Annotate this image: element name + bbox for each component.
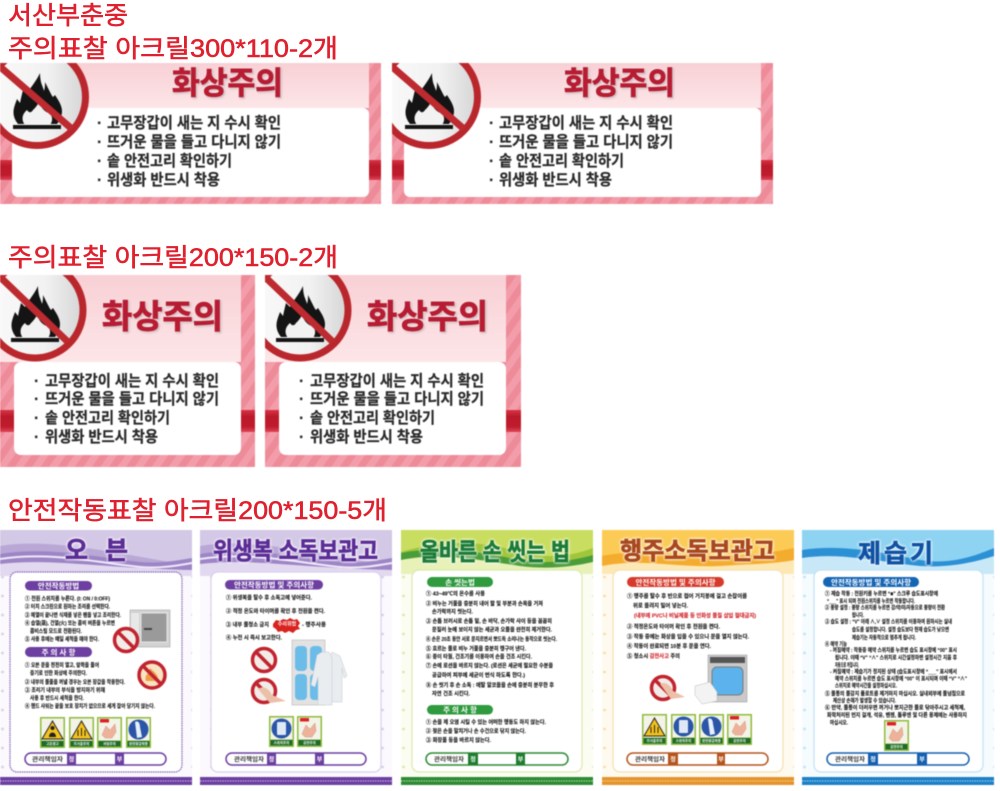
manager signature bar: 부 (718, 756, 724, 764)
instructions: ③ 습도 설정 : “V” 아래 ∧,∨ 설정 스위치를 이용하여 원하시는 실내 (825, 618, 952, 626)
instructions: 제산상 손해가 발생할 수 있습니다. (833, 697, 896, 705)
instructions: ② 적정온도와 타이머 확인 후 전원을 켠다. (627, 622, 720, 630)
instructions: 됩니다. 이때 “V” “∧” 스위치로 시간설정하면 설정시간 지움 후 (835, 654, 957, 662)
instructions: 화학처리된 먼지 걸개, 석유, 벤젠, 톨루엔 및 다른 용제에는 사용하지 (827, 711, 967, 719)
icons: safety marks: 고온경고 (46, 741, 59, 746)
pill heading (25, 647, 92, 657)
pill heading: 주 의 사 항 (42, 647, 76, 657)
list: 위생화 반드시 착용 (45, 428, 158, 446)
pill heading: 안전작동방법 및 주의사항 (831, 577, 911, 587)
icon: no fire (264, 274, 352, 362)
list: 뜨거운 물을 들고 다니지 않기 (310, 390, 484, 408)
instructions: ④ 작동이 완료되면 10분 후 문을 연다. (627, 642, 711, 650)
pill heading (427, 577, 493, 587)
pill heading: 주 의 사 항 (443, 705, 477, 715)
instructions: ③ 내부 물청소 금지 (226, 620, 269, 628)
instructions: ④ 누전 시 즉시 보고한다. (226, 633, 282, 641)
instructions: ⑤ 청소시 감전사고 주의 (627, 652, 680, 660)
list (489, 114, 673, 189)
icons: safety marks: 스위치주의 (676, 738, 691, 743)
instructions: - 꺼짐예약 : 작동중 예약 스위치를 누르면 습도 표시창에 “00” 표시 (830, 646, 957, 654)
list: · (489, 153, 494, 170)
manager signature bar: 부 (919, 756, 925, 764)
list: 뜨거운 물을 들고 다니지 않기 (499, 133, 673, 151)
manager signature bar: 관리책임자 (635, 756, 666, 764)
instructions (627, 592, 756, 660)
cautions: ② 젖은 손을 말치거나 손 수건으로 닦지 않는다. (426, 727, 526, 735)
instructions: ⑤ 물통의 물감지 플로트를 제거하지 마십시오. 실내외부에 물넘침으로 (825, 689, 965, 697)
heading: 아크릴 200x150: 주의표찰 아크릴200*150-2개 (8, 244, 338, 272)
list: · (489, 115, 494, 132)
instructions: 자동으로 꺼집니다. (835, 661, 859, 669)
instructions: 제습기는 자동적으로 멈추게 됩니다. (852, 633, 916, 641)
instructions: ② 풍량 설정 : 풍량 스위치를 누르면 강/약/미/자동으로 풍량이 전환 (825, 604, 945, 612)
list: 위생화 반드시 착용 (107, 171, 220, 189)
panel: poster towel sterilizer (602, 530, 794, 785)
list (299, 372, 484, 446)
title: 오 븐 (65, 537, 128, 565)
instructions: 공급하여 피부에 세균이 번식 하도록 한다.) (432, 671, 525, 679)
panel: poster gown sterilizer (200, 530, 392, 785)
cautions (426, 718, 546, 744)
panel: burn warning sign 300x110 first (0, 48, 381, 204)
instructions: ⑤ 사용 후에는 매일 세척을 해야 한다. (25, 635, 99, 643)
list: 위생화 반드시 착용 (499, 171, 612, 189)
icons: safety marks: 안전장갑착용 (702, 738, 721, 743)
manager signature bar: 관리책임자 (234, 756, 265, 764)
list: 고무장갑이 새는 지 수시 확인 (499, 114, 673, 132)
instructions: ① 43~49℃의 온수를 사용 (426, 589, 485, 597)
manager signature bar (827, 753, 969, 765)
pill heading: 안전작동방법 및 주의사항 (635, 577, 716, 587)
instructions: ⑥ 종이 타월, 건조기를 이용하여 손을 건조 시킨다. (426, 653, 532, 661)
icons: safety marks (642, 714, 752, 745)
cautions: 증기로 인한 화상에 주의한다. (30, 669, 87, 677)
cautions: ④ 핸드 샤워는 끝을 보호 장치가 없으므로 세게 잡아 당기지 않는다. (25, 702, 155, 710)
icons: safety marks: 안전장갑착용 (129, 741, 148, 746)
icon: no water (252, 648, 276, 672)
panel: poster dehumidifier (802, 530, 994, 785)
illustration: combi oven (130, 610, 170, 647)
panel: burn warning sign 300x110 second (391, 62, 774, 205)
manager signature bar: 정 (269, 756, 274, 764)
title: 행주소독보관고 (620, 538, 775, 565)
badge: 수리위험 (273, 618, 300, 633)
pill heading: 손 씻는법 (445, 577, 475, 587)
panel body (10, 572, 182, 772)
list: 위생화 반드시 착용 (310, 428, 423, 446)
list: · (97, 153, 102, 170)
pill heading: 안전작동방법 및 주의사항 (234, 580, 314, 590)
manager signature bar (226, 753, 366, 765)
heading: 안전작동표찰: 안전작동표찰 아크릴200*150-5개 (8, 497, 387, 525)
pill heading (427, 705, 493, 715)
list: 솥 안전고리 확인하기 (107, 152, 232, 170)
manager signature bar: 정 (670, 756, 676, 764)
instructions: ⑤ 흐르는 물로 비누 거품을 충분히 헹구어 낸다. (426, 644, 526, 652)
cautions: ① 오븐 문을 천천히 열고, 앞쪽을 들어 (25, 661, 99, 669)
instructions: ③ 작동 중에는 화상을 입을 수 있으니 문을 열지 않는다. (627, 632, 749, 640)
list: 뜨거운 물을 들고 다니지 않기 (107, 133, 281, 151)
cautions: ① 손을 제 오염 시킬 수 있는 어떠한 행동도 하지 않는다. (426, 718, 546, 726)
icons: safety marks: 스위치주의 (274, 740, 289, 745)
manager signature bar: 정 (870, 756, 876, 764)
instructions: 마십시오. (830, 718, 848, 726)
list (34, 372, 219, 446)
panel body (211, 572, 381, 772)
icons: safety marks: 끼임주의 (103, 741, 116, 746)
cautions: 사용 후 반드시 세척을 한다. (30, 694, 84, 702)
instructions: (내부에 PVC나 비닐제품 등 인화성 물질 삽입 절대금지) (634, 611, 756, 619)
instructions: ⑥ 만약, 물통이 더러우면 꺼거나 뽀지근한 물로 닦아주시고 세척제, (825, 704, 965, 712)
badge: 수리위험: 수리위험 (278, 621, 297, 628)
title: 제습기 (858, 540, 933, 568)
pill heading (25, 580, 92, 590)
list: 고무장갑이 새는 지 수시 확인 (310, 372, 484, 390)
instructions: 자연 건조 시킨다. (432, 690, 470, 698)
icons: safety marks (40, 717, 151, 748)
icon: no touch (114, 628, 138, 652)
title: 올바른 손 씻는 법 (420, 539, 570, 566)
instructions: 스위치로 예약시간을 설정하십시오. (835, 682, 897, 690)
icon: no fire (139, 662, 165, 688)
list: · (299, 410, 304, 427)
icon: no fire (0, 262, 83, 358)
instructions: ② 터치 스크린으로 원하는 조리를 선택한다. (25, 603, 110, 611)
heading: 아크릴 300x110: 주의표찰 아크릴300*110-2개 (8, 35, 338, 63)
panel: poster hand washing (401, 530, 593, 785)
list: · (299, 373, 304, 390)
manager signature bar: 부 (518, 756, 524, 764)
instructions: 콤비스팀 모드로 전환된다. (30, 627, 82, 635)
illustration: towels (695, 682, 717, 704)
manager signature bar: 관리책임자 (32, 756, 64, 764)
panel body (613, 570, 783, 772)
instructions: ① 제습 작동 : 전원키를 누르면 “■” 스크루 습도표시창에 (825, 589, 938, 597)
instructions: ④ 예약 기능 (825, 640, 847, 648)
icon: no fire (391, 62, 482, 150)
instructions: 습도를 설정합니다. 설정 습도보다 현재 습도가 낮으면 (852, 625, 949, 633)
icon: hand caution: 감전주의 (890, 744, 903, 749)
title: 화상주의 (102, 298, 223, 335)
title: 위생복 소독보관고 (213, 538, 378, 565)
list: 솥 안전고리 확인하기 (499, 152, 624, 170)
manager signature bar (25, 753, 166, 765)
pill heading: 안전작동방법 (38, 580, 79, 590)
instructions: ③ 예열이 끝나면 식재를 넣은 팬을 넣고 조리한다. (25, 611, 121, 619)
instructions: ④ 습열(蒸), 건열(火) 또는 콤비 버튼을 누르면 (25, 619, 115, 627)
manager signature bar: 정 (69, 756, 74, 764)
list: · (34, 391, 39, 408)
cautions: ③ 조리기 내부의 부식을 방지하기 위해 (25, 686, 105, 694)
icons: safety marks (269, 716, 322, 747)
title: 화상주의 (564, 66, 675, 101)
instructions: ⑦ 손에 로션을 바르지 않는다. (로션은 세균에 필요한 수분을 (426, 662, 553, 670)
instructions: ④ 손은 20초 동안 서로 문지르면서 뽀드득 소리나는 동작으로 씻는다. (426, 635, 557, 643)
list: 고무장갑이 새는 지 수시 확인 (45, 372, 219, 390)
list: · (34, 373, 39, 390)
title: 화상주의 (367, 298, 488, 335)
instructions: ① 행주를 탈수 후 반으로 접어 거치봉에 걸고 손잡이를 (627, 592, 747, 600)
instructions (25, 595, 121, 643)
illustration: towel cabinet (708, 655, 747, 702)
manager signature bar: 부 (317, 756, 323, 764)
list: · (34, 429, 39, 446)
list: · (299, 429, 304, 446)
icons: safety marks: 감전주의 (303, 740, 316, 745)
cautions: ③ 화장품 등을 바르지 않는다. (426, 736, 491, 744)
icons: safety marks: 감전주의 (733, 738, 746, 743)
manager signature bar (627, 753, 768, 765)
list: 솥 안전고리 확인하기 (45, 409, 170, 427)
list: 고무장갑이 새는 지 수시 확인 (107, 114, 281, 132)
panel body (814, 570, 983, 772)
list: 솥 안전고리 확인하기 (310, 409, 435, 427)
icon: no fire (0, 48, 86, 146)
illustration: sterilizer cabinet (292, 640, 325, 705)
manager signature bar (426, 753, 568, 765)
instructions: ① 전원 스위치를 누른다. (I: ON / 0:OFF) (25, 595, 110, 603)
instructions: ③ 손톱 브러시로 손톱 밑, 손 바닥, 손가락 사이 등을 꼼꼼히 (426, 617, 552, 625)
instructions: - 행주사용 (302, 620, 326, 628)
manager signature bar: 정 (470, 756, 476, 764)
list: · (34, 410, 39, 427)
panel body (412, 570, 582, 772)
icons: safety marks: 뜨거움주의 (74, 741, 89, 746)
list: · (489, 134, 494, 151)
heading: 서산부춘중: 서산부춘중 (8, 2, 128, 30)
instructions (226, 594, 326, 641)
instructions: 문질러 눈에 보이지 않는 세균과 오물을 완전히 제거한다. (432, 626, 552, 634)
icons: safety marks: 뜨거움주의 (647, 738, 662, 743)
manager signature bar: 관리책임자 (434, 756, 465, 764)
list: · (299, 391, 304, 408)
list: · (97, 172, 102, 189)
instructions: 됩니다. (852, 611, 864, 619)
illustration: gowns (311, 652, 347, 705)
title: 화상주의 (172, 66, 283, 101)
instructions: ② 비누는 거품을 충분히 내어 팔 및 부분과 손목을 거쳐 (426, 600, 543, 608)
list: 뜨거운 물을 들고 다니지 않기 (45, 390, 219, 408)
manager signature bar: 관리책임자 (835, 756, 866, 764)
instructions: ① 위생복을 탈수 후 소독고에 넣어준다. (226, 594, 312, 602)
cautions (25, 661, 155, 710)
instructions: “___” 표시 되며 전원스위치를 누르면 작동합니다. (827, 597, 915, 605)
instructions (825, 589, 967, 726)
instructions: - 켜짐예약 : 제습기가 정지된 상태 (습도표시창에 “___” 표시에서 (830, 668, 957, 676)
icon: no touch (652, 676, 685, 700)
instructions: 위로 올려지 밀어 넣는다. (633, 601, 688, 609)
instructions (426, 589, 557, 698)
panel: poster oven (0, 530, 192, 785)
instructions: 예약 스위치를 누르면 습도 표시창에 “00” 이 표시되며 이때 “V” “∧” (835, 674, 967, 682)
cautions: ② 내부의 물품을 꺼낼 경우는 오븐 장갑을 착용한다. (25, 678, 125, 686)
instructions: 손가락까지 씻는다. (432, 608, 473, 616)
panel: burn warning sign 200x150 second (252, 262, 521, 467)
panel: burn warning sign 200x150 first (0, 262, 255, 467)
icon: no touch (252, 680, 286, 703)
list: · (489, 172, 494, 189)
list: · (97, 115, 102, 132)
list (97, 114, 281, 189)
manager signature bar: 부 (117, 756, 123, 764)
icon: hand caution (884, 720, 909, 751)
instructions: ② 적정 온도와 타이머를 확인 후 전원을 켠다. (226, 607, 325, 615)
list: · (97, 134, 102, 151)
instructions: ⑧ 손 씻기 후 손 소독 : 에탈 알코올을 손에 충분히 분무한 후 (426, 681, 554, 689)
